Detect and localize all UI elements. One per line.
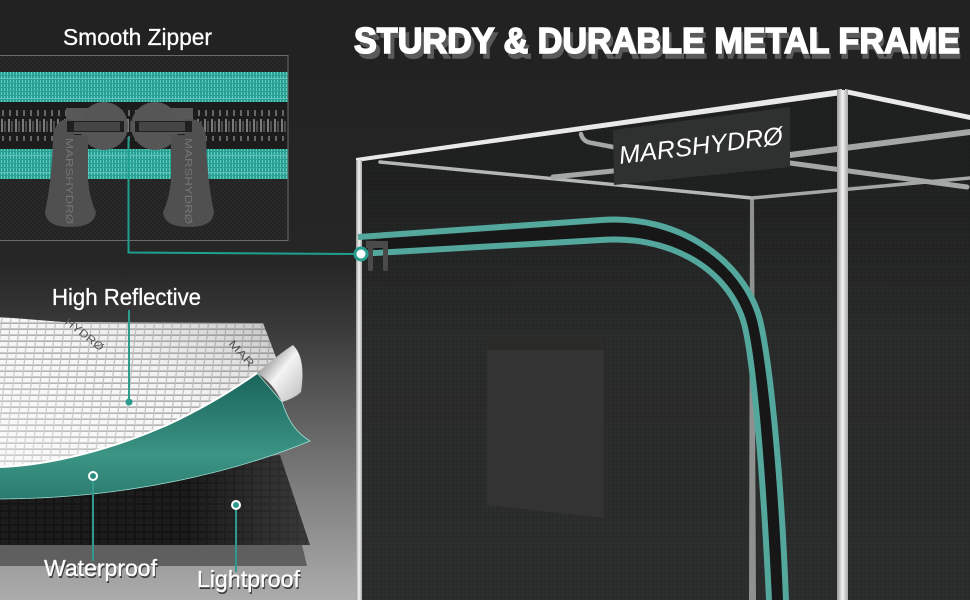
label: Waterproof [44,472,159,583]
layer shadow [0,545,307,566]
reflective silver layer: MAR [226,338,256,370]
left frame post [356,160,362,600]
lightproof black layer [0,455,310,545]
label: High Reflective: High Reflective [52,284,201,310]
connector line: zipper to tent [128,137,355,254]
metal frame top rails [356,89,970,162]
material layers illustration [0,316,310,566]
tent zipper [358,219,786,600]
rear frame post [749,198,756,600]
panel shading [360,160,970,600]
tent illustration [356,89,970,600]
reflective silver layer: HYDRØ [62,316,106,354]
curled silver corner [257,345,302,402]
right frame post [837,90,848,600]
lower teal tape [0,149,288,179]
label: Smooth Zipper: Smooth Zipper [63,24,212,50]
callout marker: tent zipper [355,248,367,260]
label: Waterproof: Waterproof [45,557,159,583]
label: High Reflective [52,284,201,406]
left zipper pull: MARSHYDRØ [63,138,74,224]
label: Lightproof [197,501,302,594]
back rails and crossbars [380,132,970,198]
label: Waterproof: Waterproof [44,555,158,581]
panel border [0,56,288,240]
left zipper pull [45,102,128,227]
sign with brand logo [613,107,790,185]
tent front panel [360,160,838,600]
waterproof teal layer [0,373,310,499]
label: Lightproof: Lightproof [198,568,302,594]
zipper teeth [0,102,288,149]
reflective silver layer [0,316,277,467]
zipper pull tabs on tent [366,241,388,271]
sign with brand logo: MARSHYDRØ [617,122,786,170]
panel: zipper close-up [0,55,288,241]
label: Lightproof: Lightproof [197,566,301,592]
upper teal tape [0,72,288,102]
right zipper pull [131,102,214,227]
right zipper pull: MARSHYDRØ [182,138,193,224]
tent right panel [848,178,970,600]
tent ceiling [358,92,970,198]
side pocket [487,337,604,518]
